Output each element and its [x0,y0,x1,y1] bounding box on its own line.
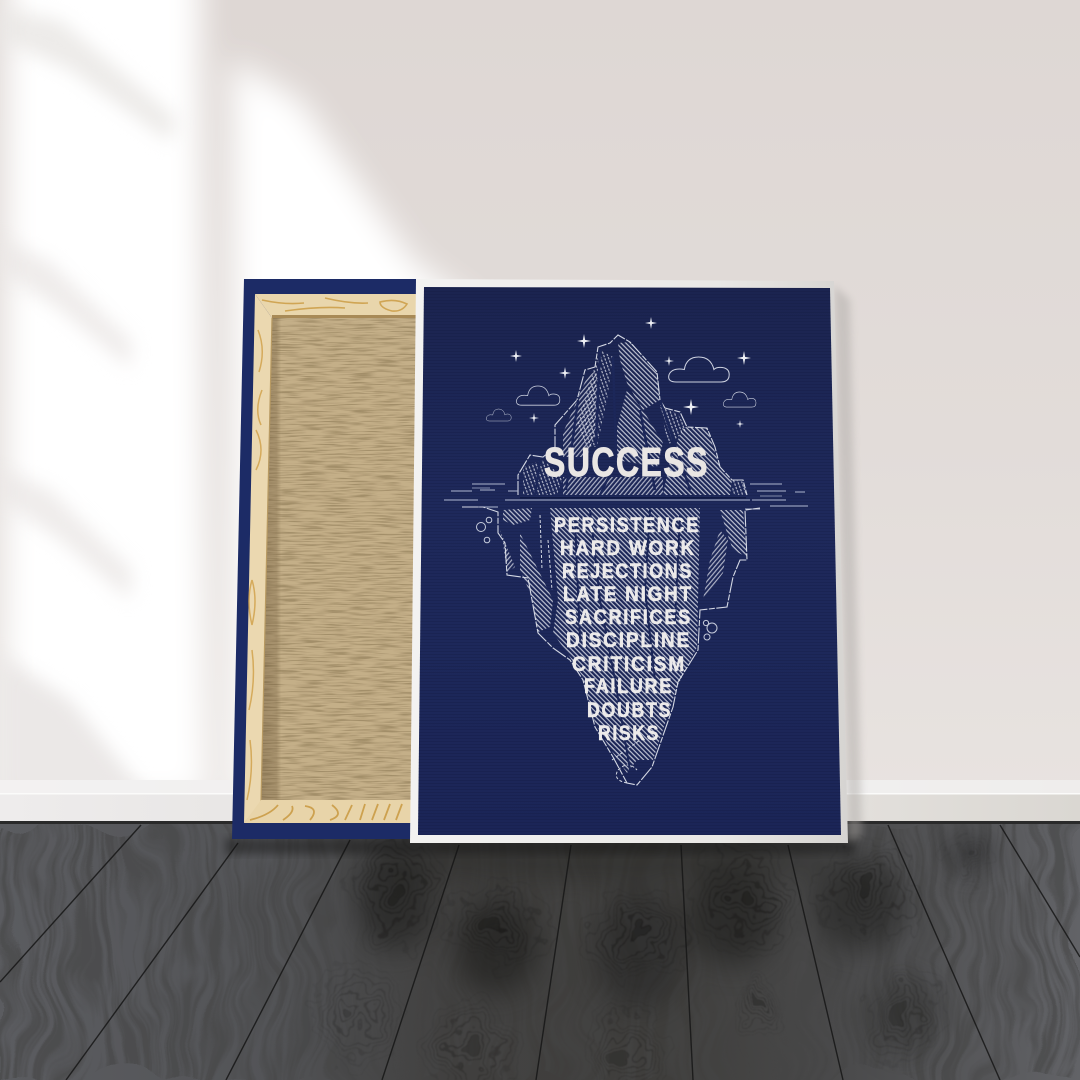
word list under the waterline: PERSISTENCE [554,513,700,537]
water lines [444,484,808,509]
clouds [486,357,756,421]
title: SUCCESS: SUCCESS [544,439,709,485]
iceberg below water [462,507,760,785]
bubbles [476,517,717,640]
wooden floor [0,824,1080,1080]
white frame [410,279,848,843]
word list under the waterline: DOUBTS [587,698,672,722]
back canvas: open stretcher frame [232,279,418,839]
wood top bar [255,294,416,318]
word list under the waterline: CRITICISM [572,652,686,676]
word list under the waterline: REJECTIONS [562,559,693,583]
plank seams [0,825,1080,1080]
word list under the waterline [554,513,700,745]
wall with sunlight [0,0,1080,800]
shadow of front canvas on wall [834,285,862,843]
floor knots and rings [309,825,996,1080]
burlap back [261,318,416,802]
baseboard [0,780,1080,825]
navy canvas wrap [232,279,418,839]
front canvas [410,279,848,843]
word list under the waterline: FAILURE [584,674,673,698]
word list under the waterline: LATE NIGHT [563,582,693,606]
stars [510,317,751,428]
wood left bar [244,294,272,823]
iceberg above water [518,335,747,495]
wood bottom bar [244,800,412,823]
floor dark zones [357,833,997,1055]
word list under the waterline: RISKS [598,721,660,745]
canvas contact shadow [225,838,855,854]
navy poster [418,287,841,835]
word list under the waterline: SACRIFICES [565,605,692,629]
word list under the waterline: DISCIPLINE [566,628,691,652]
word list under the waterline: HARD WORK [560,536,696,560]
